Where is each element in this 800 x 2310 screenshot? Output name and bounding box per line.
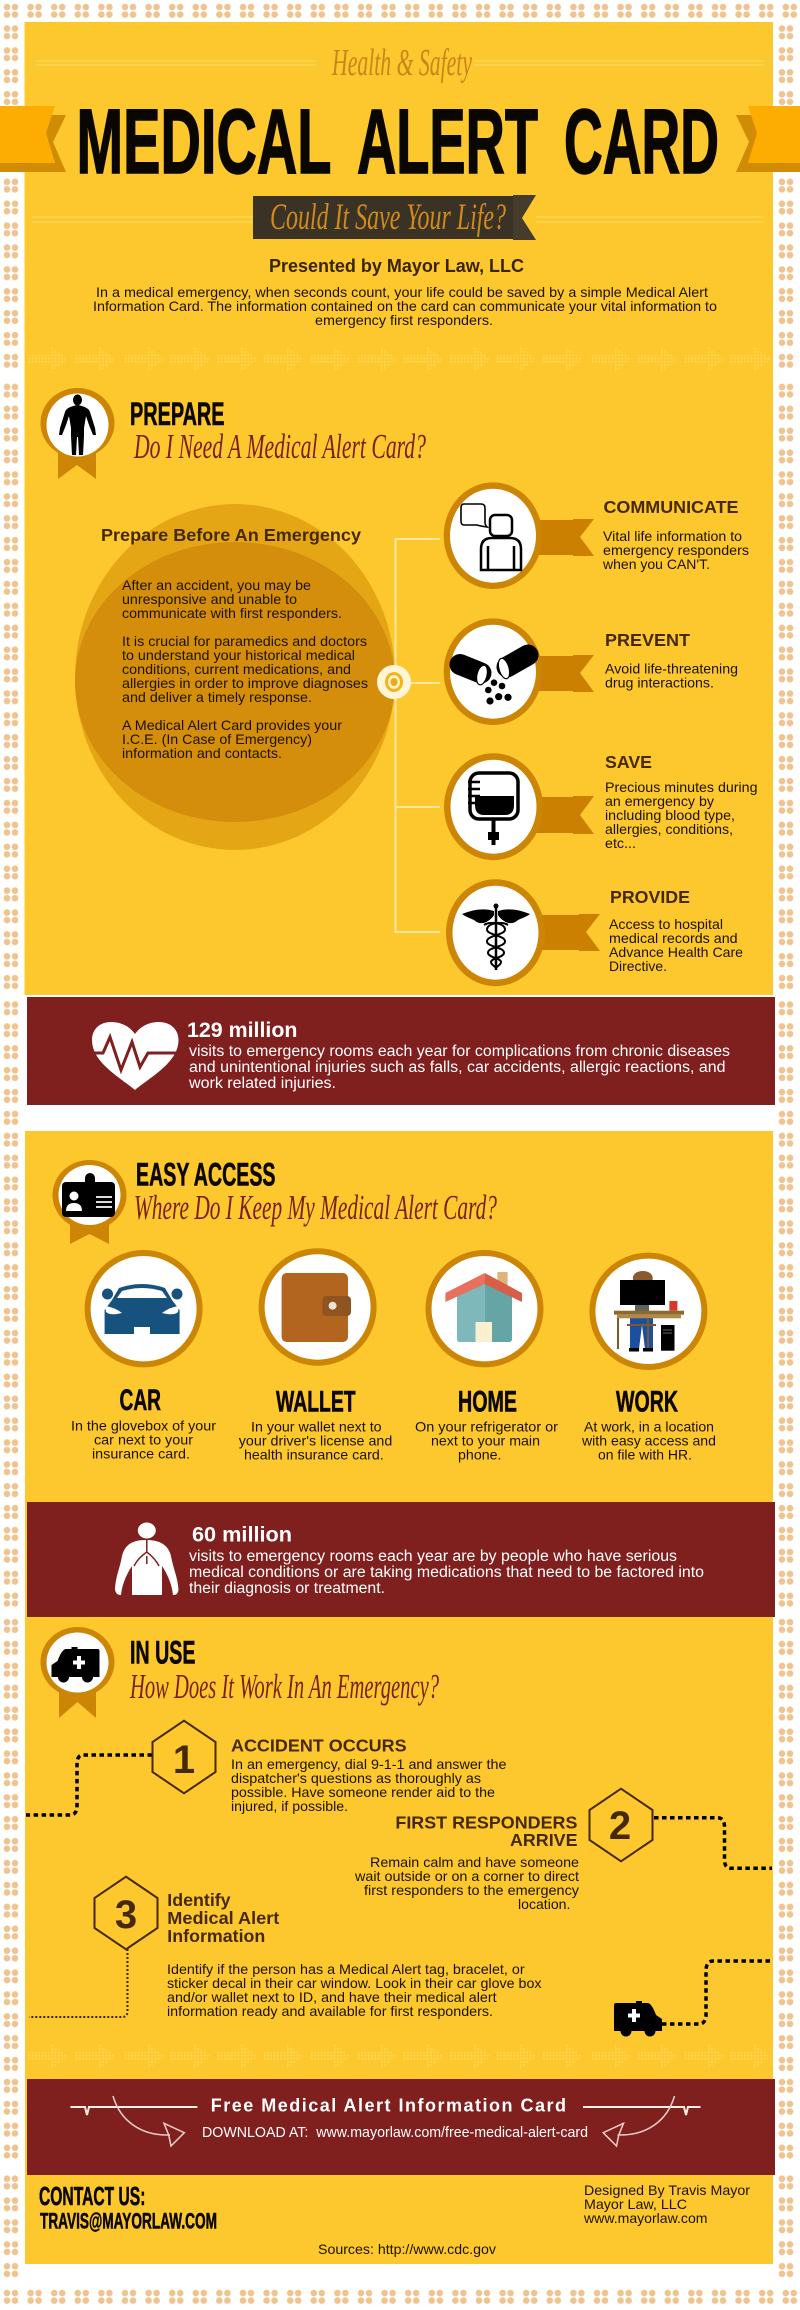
description: with easy access and — [581, 1432, 716, 1448]
text: allergies, conditions, — [605, 821, 733, 837]
label: WORK — [616, 1386, 678, 1419]
icon: caduceus — [446, 879, 545, 986]
text: location. — [518, 1896, 570, 1912]
credits: Designed By Travis Mayor — [584, 2182, 750, 2198]
description: On your refrigerator or — [415, 1418, 558, 1434]
text: PREVENT — [605, 630, 690, 650]
text: Vital life information to — [603, 528, 742, 544]
title — [76, 91, 719, 193]
text: Medical Alert — [167, 1908, 279, 1928]
item: car — [71, 1250, 216, 1462]
text: when you CAN'T. — [602, 556, 710, 572]
subtitle banner: Could It Save Your Life? — [270, 197, 506, 238]
text — [602, 497, 749, 572]
description: your driver's license and — [239, 1432, 392, 1448]
description — [239, 1418, 392, 1462]
icon: heart with ecg — [92, 1022, 178, 1090]
description: car next to your — [94, 1432, 193, 1448]
text: Identify — [167, 1890, 231, 1910]
description: insurance card. — [92, 1446, 190, 1462]
icon: pills — [444, 618, 542, 725]
hexagon number: 2 — [609, 1804, 631, 1848]
stat figure: 129 million — [187, 1019, 298, 1042]
stat figure: 60 million — [192, 1524, 292, 1547]
section: easy access — [52, 1157, 716, 1462]
text: dispatcher's questions as thoroughly as — [231, 1770, 481, 1786]
text: FIRST RESPONDERS — [395, 1812, 577, 1832]
description: next to your main — [431, 1432, 540, 1448]
credits: Mayor Law, LLC — [584, 2196, 687, 2212]
label: HOME — [458, 1386, 517, 1419]
intro text: emergency first responders. — [315, 312, 493, 328]
subheading: Where Do I Keep My Medical Alert Card? — [134, 1188, 497, 1227]
sources: Sources: http://www.cdc.gov — [318, 2241, 496, 2257]
text: Advance Health Care — [609, 944, 743, 960]
item: wallet — [239, 1248, 392, 1462]
text block: prepare before an emergency: allergies in order to improve diagnoses — [122, 675, 368, 691]
icon: house — [426, 1250, 544, 1367]
text block: prepare before an emergency: and deliver a timely response. — [122, 689, 312, 705]
text: injured, if possible. — [231, 1798, 348, 1814]
text: ACCIDENT OCCURS — [231, 1736, 407, 1756]
icon: iv bag — [444, 753, 543, 860]
arrow left — [113, 2096, 184, 2146]
decorative ribbon left — [0, 106, 66, 172]
arrow band — [28, 2044, 771, 2069]
step 1 — [26, 1721, 507, 1815]
category label: Health and Safety — [36, 42, 764, 84]
stat text — [189, 1548, 704, 1597]
arrow band — [28, 347, 771, 372]
text: wait outside or on a corner to direct — [354, 1868, 579, 1884]
stat text: work related injuries. — [188, 1075, 336, 1092]
panel: yellow background, access and in use — [25, 1131, 773, 2264]
big circle — [75, 504, 395, 850]
description: In the glovebox of your — [71, 1418, 216, 1434]
text: Identify if the person has a Medical Alert tag, bracelet, or — [167, 1961, 525, 1977]
description: on file with HR. — [598, 1446, 692, 1462]
text: emergency responders — [603, 542, 749, 558]
section: prepare — [40, 388, 758, 986]
item: prevent — [444, 618, 738, 725]
text: sticker decal in their car window. Look in their car glove box — [167, 1975, 542, 1991]
icon: ambulance — [614, 2001, 662, 2036]
category label: Health and Safety: Health & Safety — [331, 42, 472, 84]
item: communicate — [444, 482, 749, 589]
text block: prepare before an emergency: A Medical Alert Card provides your — [122, 717, 342, 733]
stat band: 129 million — [27, 997, 775, 1105]
text — [231, 1736, 507, 1814]
text block: prepare before an emergency: It is crucial for paramedics and doctors — [122, 633, 367, 649]
stat text — [188, 1043, 730, 1092]
stat text: medical conditions or are taking medications that need to be factored into — [189, 1564, 704, 1581]
intro text: Information Card. The information contained on the card can communicate your vital information to — [93, 298, 717, 314]
text: Precious minutes during — [605, 779, 758, 795]
text block: prepare before an emergency: I.C.E. (In Case of Emergency) — [122, 731, 312, 747]
text: In an emergency, dial 9-1-1 and answer the — [231, 1756, 507, 1772]
heading: prepare: PREPARE — [130, 396, 224, 432]
heading: in use: IN USE — [130, 1634, 195, 1670]
ecg line right — [583, 2107, 700, 2115]
hexagon number: 3 — [115, 1893, 137, 1937]
ribbon — [530, 655, 594, 692]
contact — [39, 2181, 217, 2233]
item: work — [581, 1253, 716, 1462]
text: PROVIDE — [610, 887, 690, 907]
dotted path — [29, 1949, 128, 2017]
ecg line left — [70, 2107, 197, 2115]
text — [605, 752, 758, 851]
text: Directive. — [609, 958, 667, 974]
contact: TRAVIS@MAYORLAW.COM — [40, 2208, 217, 2233]
node — [377, 665, 411, 699]
connector lines — [396, 539, 440, 932]
description — [581, 1418, 716, 1462]
text — [605, 630, 738, 690]
band: free card download — [27, 2079, 775, 2175]
text — [609, 887, 743, 974]
arrow right — [603, 2096, 674, 2146]
label: CAR — [120, 1384, 161, 1417]
label: WALLET — [276, 1386, 356, 1419]
credits — [583, 2182, 750, 2226]
text block: prepare before an emergency: communicate with first responders. — [122, 605, 342, 621]
item: provide — [446, 879, 743, 986]
title: ALERT — [357, 91, 538, 193]
ribbon — [530, 796, 594, 834]
dotted path — [26, 1755, 152, 1815]
title: MEDICAL — [76, 91, 332, 193]
icon: person at desk — [589, 1253, 707, 1370]
subtitle banner — [32, 195, 763, 240]
text: first responders to the emergency — [364, 1882, 579, 1898]
intro text: In a medical emergency, when seconds count, your life could be saved by a simple Medical Alert — [96, 284, 708, 300]
text block: prepare before an emergency: Prepare Before An Emergency — [101, 525, 361, 545]
item: save — [444, 752, 758, 860]
text: Avoid life-threatening — [605, 660, 738, 676]
panel: yellow background, header and prepare — [24, 22, 773, 995]
description: At work, in a location — [584, 1418, 714, 1434]
text: information ready and available for first responders. — [167, 2003, 493, 2019]
credits: www.mayorlaw.com — [583, 2210, 708, 2226]
text — [354, 1812, 579, 1912]
dotted path to ambulance — [662, 1961, 772, 2024]
footer — [39, 2181, 750, 2257]
icon: person badge — [40, 388, 114, 479]
step 3 — [29, 1877, 542, 2019]
decorative ribbon right — [736, 106, 800, 172]
presenter: Presented by Mayor Law, LLC — [269, 256, 524, 276]
hexagon number — [590, 1789, 652, 1861]
text: drug interactions. — [605, 674, 714, 690]
icon: id card badge — [52, 1160, 126, 1244]
dotted path — [654, 1818, 772, 1868]
description — [415, 1418, 558, 1462]
text: medical records and — [609, 930, 738, 946]
ribbon — [530, 519, 594, 556]
text block: prepare before an emergency — [101, 525, 368, 761]
hexagon number — [152, 1721, 216, 1793]
description: health insurance card. — [244, 1446, 384, 1462]
hexagon number: 1 — [173, 1738, 195, 1782]
stat text: visits to emergency rooms each year for complications from chronic diseases — [189, 1043, 730, 1060]
text block: prepare before an emergency: to understand your historical medical — [122, 647, 355, 663]
text block: prepare before an emergency: information and contacts. — [122, 745, 282, 761]
stat text: visits to emergency rooms each year are by people who have serious — [189, 1548, 677, 1565]
heading: easy access: EASY ACCESS — [136, 1157, 276, 1193]
icon: person with speech bubble — [444, 482, 542, 589]
intro text — [93, 284, 717, 328]
section: in use — [26, 1627, 772, 2036]
text: Access to hospital — [609, 916, 723, 932]
icon: car — [85, 1250, 203, 1367]
text block: prepare before an emergency: After an accident, you may be — [122, 577, 311, 593]
text: Remain calm and have someone — [370, 1854, 579, 1870]
text: possible. Have someone render aid to the — [231, 1784, 495, 1800]
ribbon — [535, 914, 600, 951]
text: SAVE — [605, 752, 652, 772]
step 2 — [354, 1789, 772, 1912]
description: phone. — [458, 1446, 502, 1462]
band title: Free Medical Alert Information Card — [211, 2096, 566, 2116]
hexagon number — [94, 1877, 158, 1949]
description: In your wallet next to — [251, 1418, 382, 1434]
description — [71, 1418, 216, 1462]
text — [167, 1890, 542, 2019]
download text: DOWNLOAD AT: www.mayorlaw.com/free-medical-alert-card — [202, 2124, 588, 2141]
icon: ambulance badge — [40, 1627, 114, 1718]
text: an emergency by — [605, 793, 714, 809]
icon: torso with lungs — [115, 1522, 178, 1595]
text: etc... — [605, 835, 636, 851]
subheading: How Does It Work In An Emergency? — [129, 1667, 439, 1706]
text: including blood type, — [605, 807, 735, 823]
text: and/or wallet next to ID, and have their medical alert — [167, 1989, 497, 2005]
text block: prepare before an emergency: conditions, current medications, and — [122, 661, 351, 677]
item: home — [415, 1250, 558, 1462]
subheading: Do I Need A Medical Alert Card? — [133, 427, 426, 466]
text block: prepare before an emergency: unresponsive and unable to — [122, 591, 297, 607]
text: COMMUNICATE — [604, 497, 738, 517]
text: ARRIVE — [510, 1830, 578, 1850]
icon: wallet — [259, 1248, 377, 1366]
header — [0, 42, 800, 328]
contact: CONTACT US: — [39, 2181, 145, 2211]
stat text: their diagnosis or treatment. — [189, 1580, 385, 1597]
stat band: 60 million — [27, 1502, 775, 1617]
stat text: and unintentional injuries such as falls, car accidents, allergic reactions, and — [189, 1059, 726, 1076]
text: Information — [167, 1926, 265, 1946]
